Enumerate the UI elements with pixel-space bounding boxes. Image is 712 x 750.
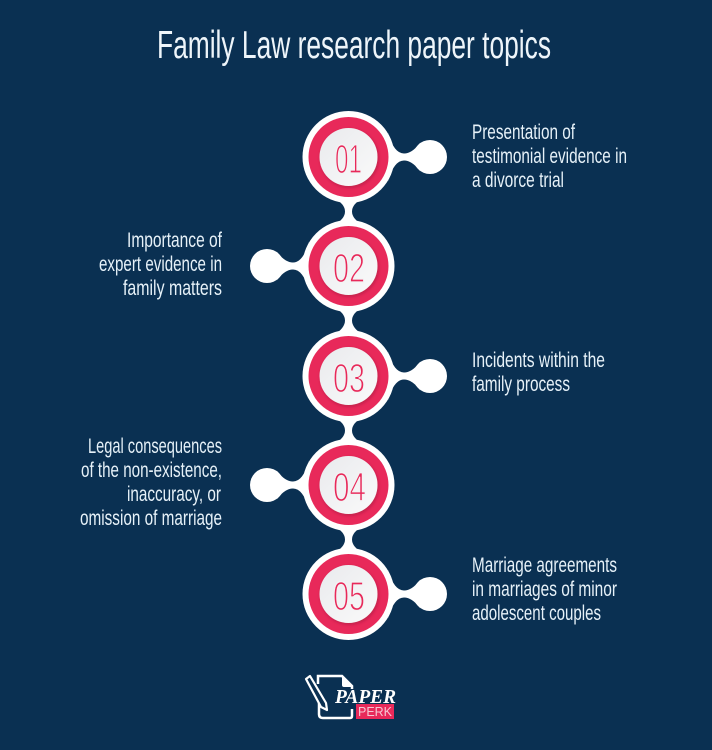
text: topic 02: family matters xyxy=(123,277,222,300)
text: topic 01: a divorce trial xyxy=(472,169,564,192)
step 03 xyxy=(302,330,447,422)
text: topic 01: Presentation of xyxy=(472,121,575,144)
text: topic 02 xyxy=(99,229,222,300)
logo word PERK: PERK xyxy=(358,704,392,719)
red ring 05 xyxy=(308,554,388,634)
number 01: 01 xyxy=(335,136,362,182)
outer ring 02 xyxy=(302,220,394,312)
icon: document xyxy=(318,676,352,718)
text: topic 02: expert evidence in xyxy=(99,253,222,276)
node connector right 01 xyxy=(388,133,420,181)
outer ring 01 xyxy=(302,111,394,203)
small white node 01 xyxy=(413,140,447,174)
step 01 xyxy=(302,111,447,203)
text: topic 05: adolescent couples xyxy=(472,602,601,625)
small white node 05 xyxy=(413,577,447,611)
inner disc 04 xyxy=(320,456,378,514)
node connector left 04 xyxy=(277,461,309,509)
text: topic 05: in marriages of minor xyxy=(472,578,617,601)
node connector left 02 xyxy=(277,242,309,290)
logo word PAPER: PAPER xyxy=(334,686,396,708)
outer ring 04 xyxy=(302,439,394,531)
text: topic 04 xyxy=(80,435,222,530)
text: topic 05 xyxy=(472,554,617,625)
text: topic 04: of the non-existence, xyxy=(81,459,222,482)
icon: document corner fold xyxy=(342,675,353,687)
number 05: 05 xyxy=(333,573,365,619)
text: topic 04: inaccuracy, or xyxy=(127,483,221,506)
number 02: 02 xyxy=(333,245,365,291)
red ring 02 xyxy=(308,226,388,306)
number 03: 03 xyxy=(333,355,365,401)
text: topic 01: testimonial evidence in xyxy=(472,145,627,168)
text: topic 03 xyxy=(472,349,605,396)
node connector right 05 xyxy=(388,570,420,618)
inner disc 02 xyxy=(320,237,378,295)
step 02 xyxy=(250,220,394,312)
logo badge PERK xyxy=(356,704,394,719)
outer ring 03 xyxy=(302,330,394,422)
outer ring 05 xyxy=(302,548,394,640)
inner disc 05 xyxy=(320,565,378,623)
node connector right 03 xyxy=(388,352,420,400)
small white node 04 xyxy=(250,468,284,502)
red ring 01 xyxy=(308,117,388,197)
logo: Paper Perk xyxy=(306,675,396,719)
step 04 xyxy=(250,439,394,531)
small white node 02 xyxy=(250,249,284,283)
red ring 04 xyxy=(308,445,388,525)
text: topic 04: Legal consequences xyxy=(88,435,222,458)
text: topic 02: Importance of xyxy=(127,229,222,252)
timeline connector spine xyxy=(334,198,363,553)
red ring 03 xyxy=(308,336,388,416)
text: topic 03: Incidents within the xyxy=(472,349,605,372)
inner disc 03 xyxy=(320,347,378,405)
inner disc 01 xyxy=(320,128,378,186)
small white node 03 xyxy=(413,359,447,393)
step 05 xyxy=(302,548,447,640)
icon: pencil xyxy=(306,676,327,710)
text: topic 04: omission of marriage xyxy=(80,507,222,530)
text: topic 05: Marriage agreements xyxy=(472,554,617,577)
number 04: 04 xyxy=(333,464,366,510)
text: topic 03: family process xyxy=(472,373,570,396)
text: topic 01 xyxy=(472,121,627,192)
